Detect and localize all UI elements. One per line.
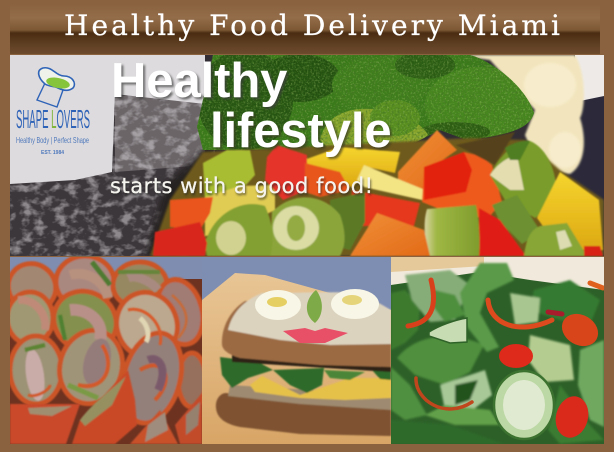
hero photo: vegetables [10, 50, 604, 256]
egg eyes [255, 289, 379, 320]
subheading: starts with a good food! [110, 174, 373, 198]
headline: Healthy lifestyle: lifestyle [210, 104, 392, 158]
photo: green salad [391, 257, 604, 444]
carrot top [398, 130, 457, 190]
okra left lower [205, 204, 273, 256]
red corner [584, 246, 603, 256]
subheading: starts with a good food! [111, 176, 374, 200]
cucumber slices [429, 318, 554, 439]
logo established: EST. 1984 [41, 150, 64, 156]
cauliflower [455, 55, 584, 174]
okra right [490, 141, 556, 218]
photo: pinwheel wraps [0, 254, 210, 444]
filling dark layer [228, 385, 391, 410]
lime okra upper left [203, 150, 255, 200]
red pepper left [153, 222, 207, 256]
logo wordmark: SHAPE LOVERS [16, 104, 90, 134]
red pepper centre left [265, 145, 307, 200]
headline: Healthy lifestyle: Healthy [111, 54, 287, 108]
dark seam [232, 355, 391, 372]
bottom bread [216, 393, 391, 436]
red-orange under wedge [350, 190, 420, 226]
carrot bottom [350, 213, 430, 256]
front row rolls [10, 336, 62, 404]
okra bottom middle [425, 205, 480, 256]
logo: chef hat heart [37, 68, 74, 107]
leaf nose [307, 290, 322, 323]
romaine leaf [460, 263, 514, 352]
header banner [10, 4, 600, 54]
spinach [220, 357, 273, 388]
pale yellow left [205, 185, 275, 236]
okra lower right [492, 195, 541, 244]
red bottom [479, 208, 526, 256]
okra centre [270, 197, 344, 256]
photo: sandwich with face [202, 257, 391, 444]
leaves [391, 290, 420, 350]
headline: Healthy lifestyle: Healthy [113, 56, 289, 110]
broccoli [197, 55, 534, 150]
white card with logo [10, 55, 604, 184]
top bread crumb [228, 292, 391, 345]
lips [283, 328, 348, 343]
roll fillings [18, 262, 186, 402]
small pepper centre [305, 163, 350, 197]
vegetable pile backing [150, 138, 604, 256]
orange pepper left [170, 197, 213, 230]
okra dark centre [330, 192, 365, 250]
yellow white wedge [357, 165, 425, 200]
mango right [537, 172, 603, 250]
yellow mango left [290, 147, 400, 187]
dark textured tray [10, 95, 604, 256]
orange pepper [422, 152, 502, 219]
headline: Healthy lifestyle: lifestyle [212, 106, 394, 160]
dark gap fill under broccoli [456, 132, 515, 165]
egg filling [250, 376, 391, 400]
tomatoes [499, 308, 604, 441]
headline: Healthy lifestyle [111, 54, 394, 160]
red pepper strips [408, 280, 603, 409]
middle row rolls [7, 292, 53, 344]
title: Healthy Food Delivery Miami [64, 9, 560, 42]
logo tagline: Healthy Body | Perfect Shape [16, 135, 89, 145]
back row rolls [10, 260, 58, 304]
okra bottom right [524, 223, 587, 256]
side-view wraps [10, 370, 202, 444]
top bread crust [222, 301, 391, 367]
diced vegetables [153, 130, 603, 256]
